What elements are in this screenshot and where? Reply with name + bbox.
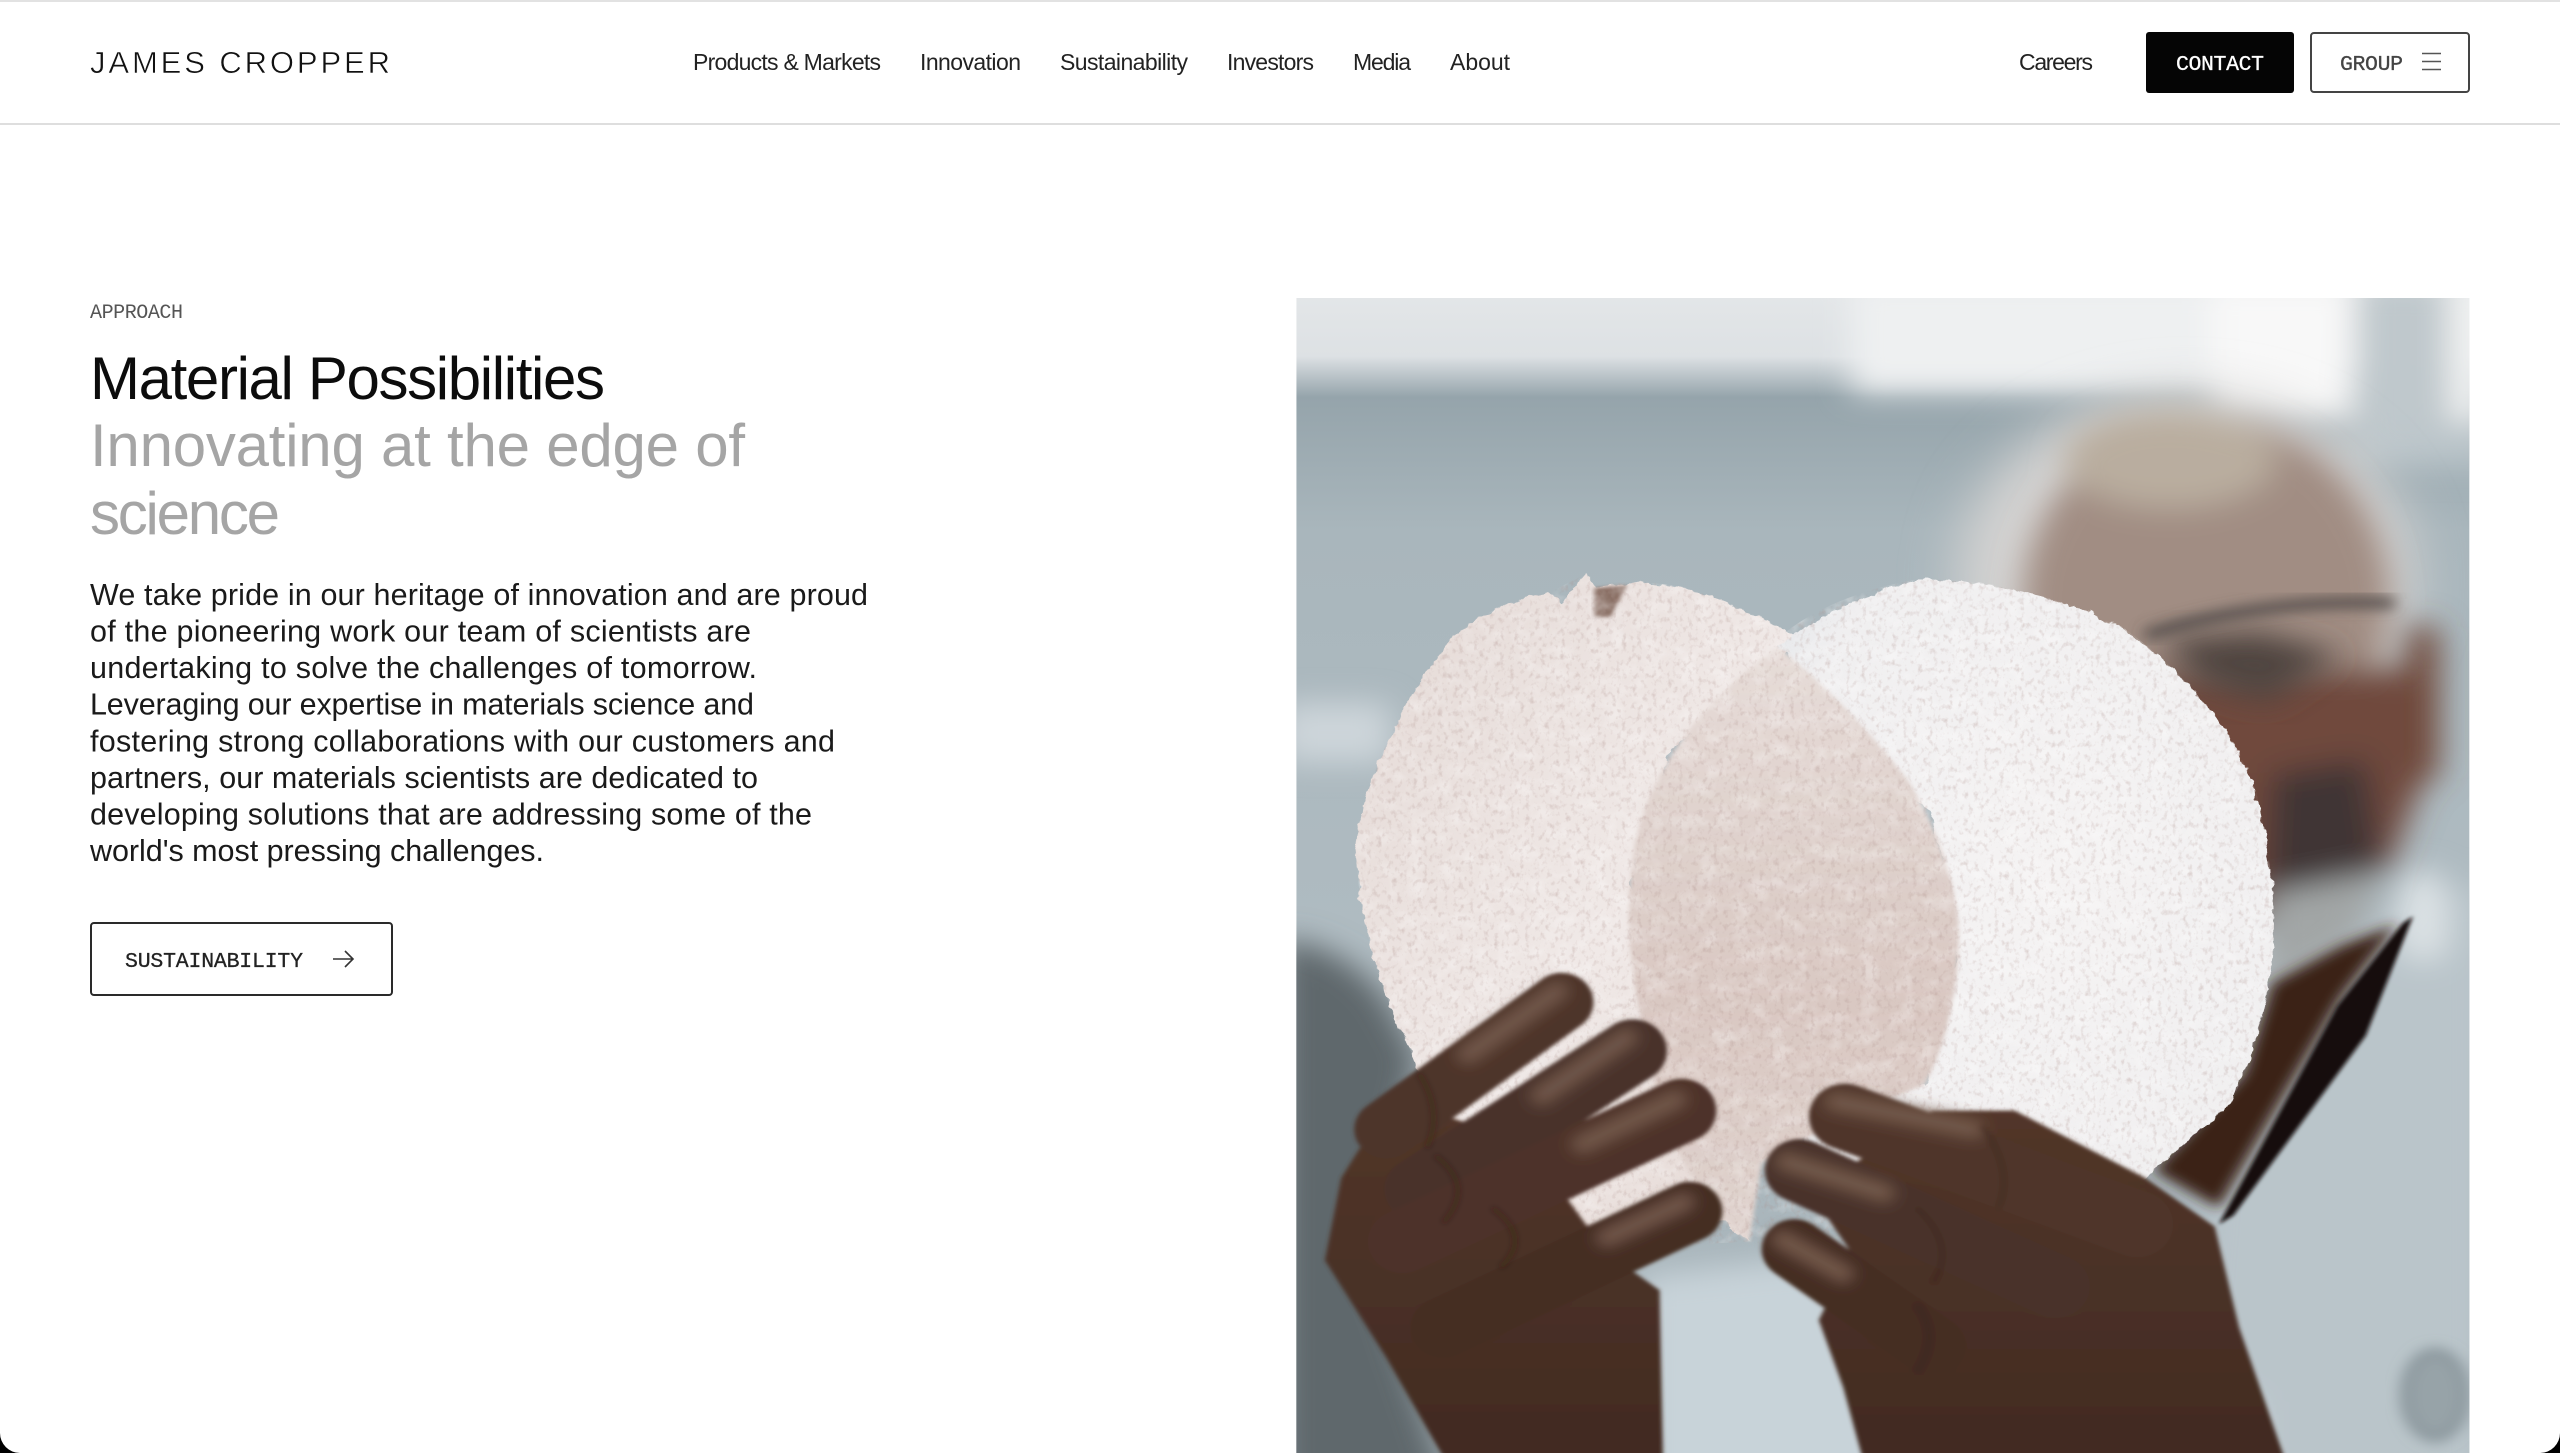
body paragraph: partners, our materials scientists are dedicated to <box>90 761 758 795</box>
left paper disc <box>1355 573 1802 1253</box>
icon: arrow <box>333 951 353 967</box>
group menu button: GROUP <box>2340 53 2403 77</box>
torn notch <box>1594 585 1627 617</box>
body paragraph: of the pioneering work our team of scientists are <box>90 615 751 649</box>
neck <box>2153 924 2398 1208</box>
head <box>1958 392 2439 998</box>
main navigation links: Sustainability <box>1060 49 1188 75</box>
main navigation links <box>693 49 1511 75</box>
glasses <box>2145 603 2394 703</box>
sustainability button: SUSTAINABILITY <box>125 950 303 974</box>
subheading <box>90 412 745 547</box>
main navigation links: Investors <box>1227 49 1314 75</box>
body paragraph: developing solutions that are addressing some of the <box>90 797 812 831</box>
rounded page corners <box>0 1433 2560 1453</box>
background figure <box>1639 392 2488 1453</box>
subheading: science <box>90 480 280 547</box>
navigation header <box>0 0 2560 125</box>
main navigation links: Products & Markets <box>693 49 881 75</box>
main navigation links: Media <box>1353 49 1411 75</box>
photo: scientist holding paper discs <box>1280 280 2504 1453</box>
main navigation links: Innovation <box>920 49 1021 75</box>
icon: hamburger menu <box>2422 54 2441 70</box>
subheading: Innovating at the edge of <box>90 412 745 479</box>
shirt logo <box>2404 1352 2466 1438</box>
finger creases <box>1420 1077 1992 1226</box>
overlapping translucent lens <box>1629 647 1959 1242</box>
logo wordmark: JAMES CROPPER <box>90 45 390 80</box>
main navigation links: About <box>1450 49 1511 75</box>
paper fibre texture <box>1353 572 2276 1245</box>
right paper disc <box>1778 579 2274 1238</box>
body paragraph: undertaking to solve the challenges of tomorrow. <box>90 651 757 685</box>
careers link: Careers <box>2019 49 2093 75</box>
group menu button <box>2311 33 2469 92</box>
heading <box>90 345 745 547</box>
body paragraph: Leveraging our expertise in materials science and <box>90 688 754 722</box>
collar <box>2219 916 2413 1224</box>
photo background wall <box>1296 298 2469 1453</box>
right hand <box>1419 1073 2296 1453</box>
contact button <box>2146 32 2294 93</box>
body paragraph <box>89 578 868 868</box>
heading: Material Possibilities <box>90 345 605 412</box>
body paragraph: world's most pressing challenges. <box>89 834 544 868</box>
body paragraph: fostering strong collaborations with our customers and <box>90 724 835 758</box>
contact button: CONTACT <box>2176 53 2264 77</box>
sustainability button <box>91 923 392 995</box>
body paragraph: We take pride in our heritage of innovation and are proud <box>90 578 868 612</box>
left hand <box>1325 991 1690 1453</box>
section eyebrow: APPROACH <box>90 302 183 325</box>
